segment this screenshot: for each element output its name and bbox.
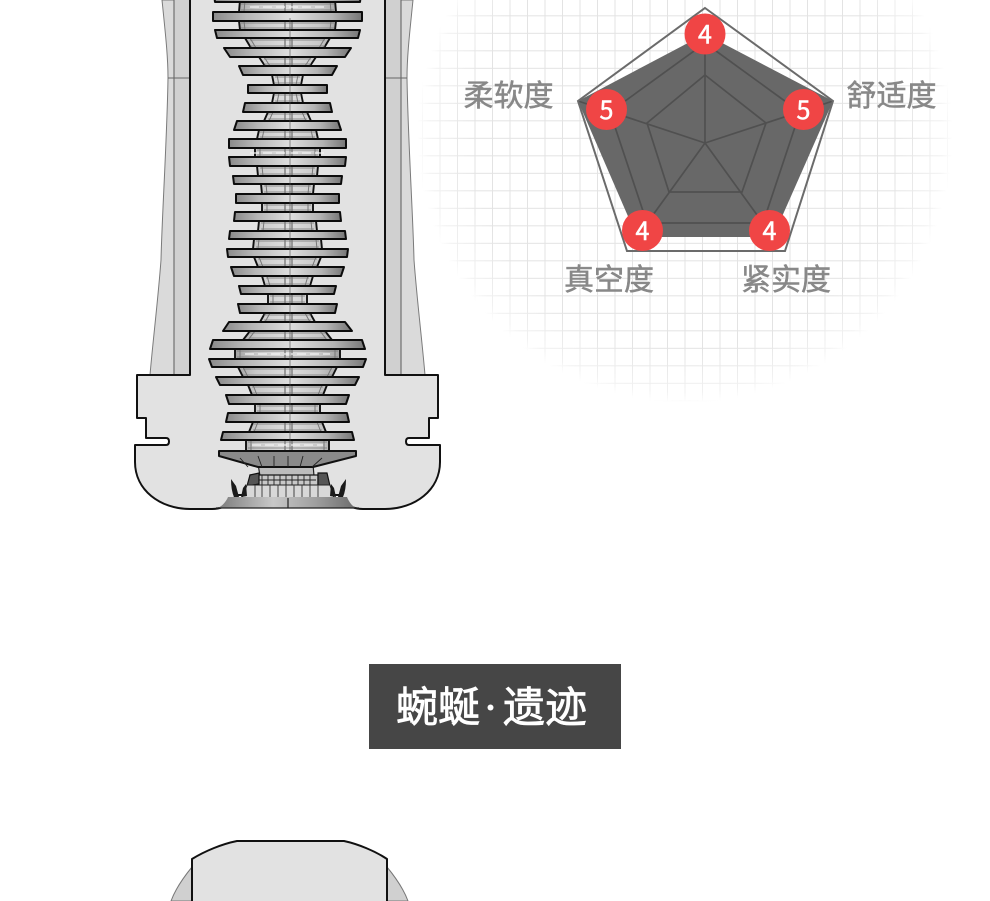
outer pentagon bbox=[578, 8, 833, 251]
outer sleeve curve: left bbox=[171, 867, 192, 901]
score: bottom left bbox=[622, 210, 663, 251]
section title banner: 蜿蜒 bbox=[396, 684, 480, 731]
radar chart panel bbox=[415, 0, 955, 405]
inner web lines bbox=[578, 34, 833, 237]
axis label: softness: 柔软度 bbox=[464, 80, 554, 113]
score: left bbox=[586, 89, 627, 130]
faded grid background bbox=[415, 0, 955, 405]
cross-section diagram: upper product bbox=[135, 0, 440, 509]
score: top: 4 bbox=[698, 16, 712, 52]
score: bottom right bbox=[749, 210, 790, 251]
cross-section diagram: next product (top cut off) bbox=[171, 841, 408, 901]
center axis line bbox=[289, 18, 291, 452]
sleeve dome bbox=[192, 841, 387, 901]
left clip barbs bbox=[231, 479, 247, 497]
score: right: 5 bbox=[797, 91, 810, 127]
sleeve body with flanged base bbox=[135, 0, 440, 509]
right clip barbs bbox=[330, 479, 346, 497]
section title banner bbox=[369, 664, 621, 749]
outer sleeve curve: right bbox=[387, 867, 408, 901]
score: right bbox=[783, 89, 824, 130]
data area bbox=[578, 34, 833, 237]
axis label: tightness: 紧实度 bbox=[741, 264, 831, 297]
score: bottom left: 4 bbox=[636, 212, 650, 248]
axis label: comfort: 舒适度 bbox=[846, 80, 936, 113]
outer sleeve: left wall bbox=[150, 0, 190, 375]
axis label: vacuum: 真空度 bbox=[564, 264, 654, 297]
valve assembly at base bbox=[216, 451, 359, 508]
outer sleeve: right wall bbox=[385, 0, 425, 375]
inner core bbox=[235, 0, 340, 452]
score: bottom right: 4 bbox=[763, 212, 777, 248]
section title banner: 遗迹 bbox=[503, 684, 587, 731]
ribbed fins bbox=[209, 0, 366, 440]
title separator dot bbox=[488, 704, 494, 710]
score: top bbox=[684, 14, 726, 54]
score: left: 5 bbox=[600, 91, 613, 127]
